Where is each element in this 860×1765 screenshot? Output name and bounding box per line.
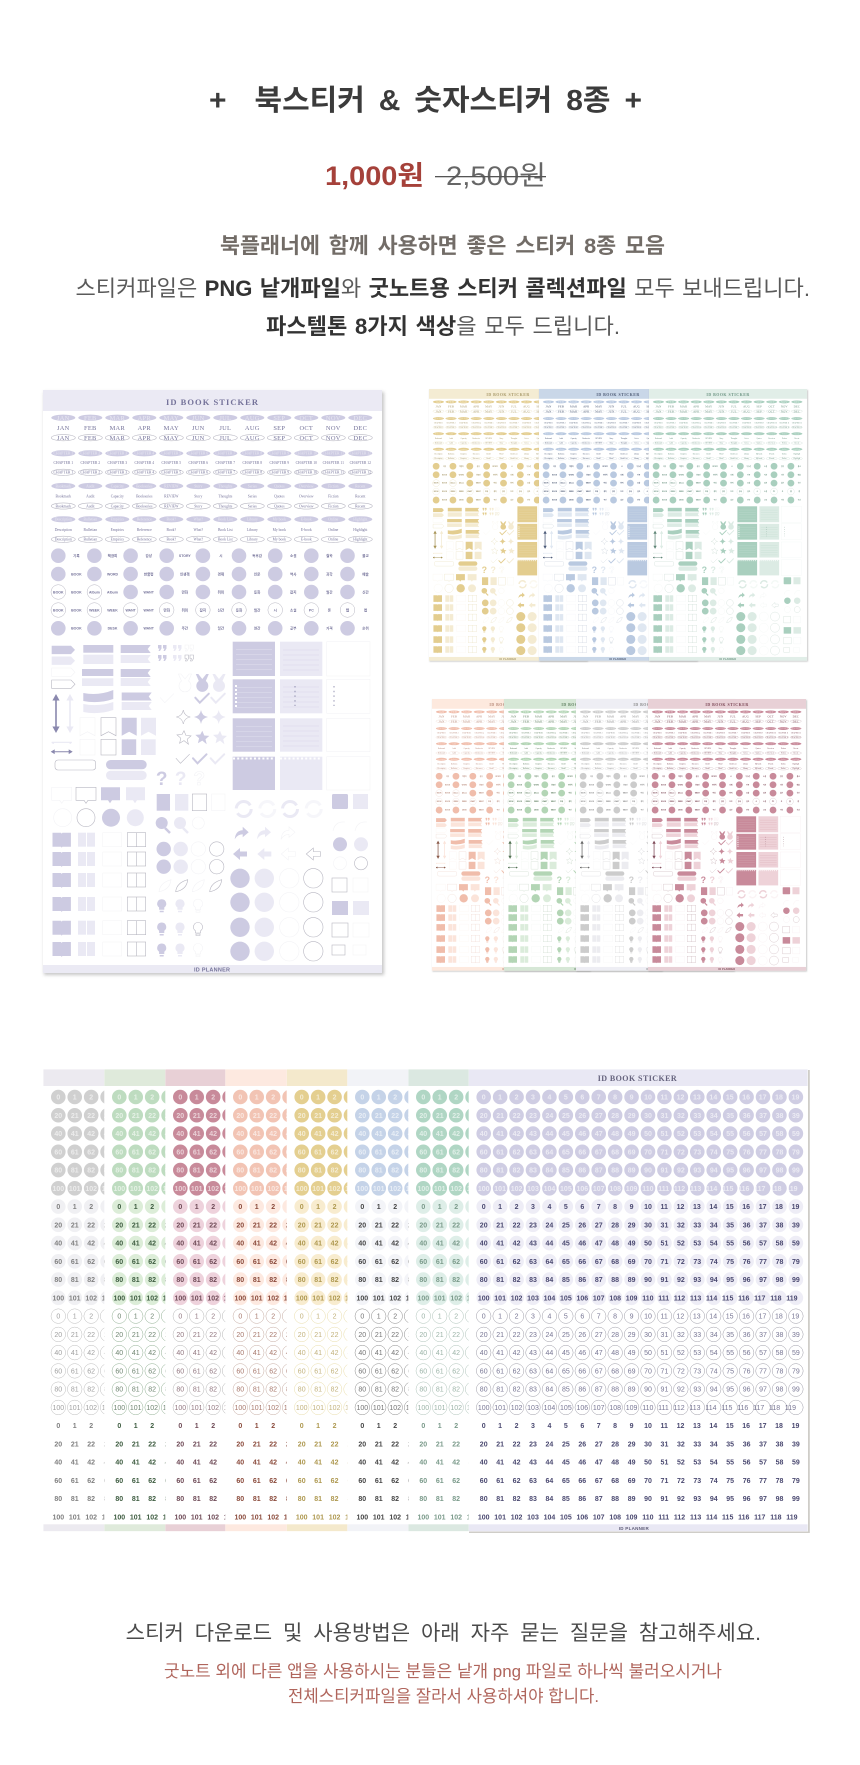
number sticker strip: green	[104, 1070, 166, 1532]
panel: mint sticker sheet	[649, 389, 808, 662]
number sticker strip: yellow	[286, 1069, 348, 1532]
sale price: 1,000원	[325, 161, 424, 191]
original price struck through: 2,500원	[446, 161, 546, 191]
panel: lavender full sticker sheet	[43, 390, 384, 975]
download guide note: 스티커 다운로드 및 사용방법은 아래 자주 묻는 질문을 참고해주세요.	[126, 1622, 761, 1645]
red note line 2: 전체스티커파일을 잘라서 사용하셔야 합니다.	[288, 1687, 599, 1706]
panel: yellow sticker sheet	[429, 389, 588, 662]
description line 1: 스티커파일은 PNG 낱개파일와 굿노트용 스티커 콜렉션파일 모두 보내드립니다.	[76, 276, 810, 301]
number sticker strip: mint	[408, 1070, 469, 1532]
panel: gray sticker sheet	[576, 699, 735, 972]
subtitle: 북플래너에 함께 사용하면 좋은 스티커 8종 모음	[220, 233, 665, 258]
number sticker strip: peach	[226, 1070, 287, 1532]
panel: green sticker sheet	[504, 699, 663, 972]
description line 2: 파스텔톤 8가지 색상을 모두 드립니다.	[266, 314, 620, 339]
panel: rose sticker sheet	[648, 699, 807, 972]
panel: blue sticker sheet	[539, 389, 698, 662]
number sticker strip: gray	[44, 1070, 104, 1531]
panel: peach sticker sheet	[432, 699, 591, 972]
number sticker sheet: lavender	[469, 1070, 808, 1531]
sheet edge shadow	[469, 1070, 810, 1533]
red note line 1: 굿노트 외에 다른 앱을 사용하시는 분들은 낱개 png 파일로 하나씩 불러오시거나	[164, 1662, 722, 1681]
number sticker strip: blue	[348, 1070, 408, 1531]
number sticker strip: rose	[166, 1069, 226, 1532]
price block	[325, 161, 546, 191]
title: + 북스티커 & 숫자스티커 8종 +	[209, 84, 642, 117]
